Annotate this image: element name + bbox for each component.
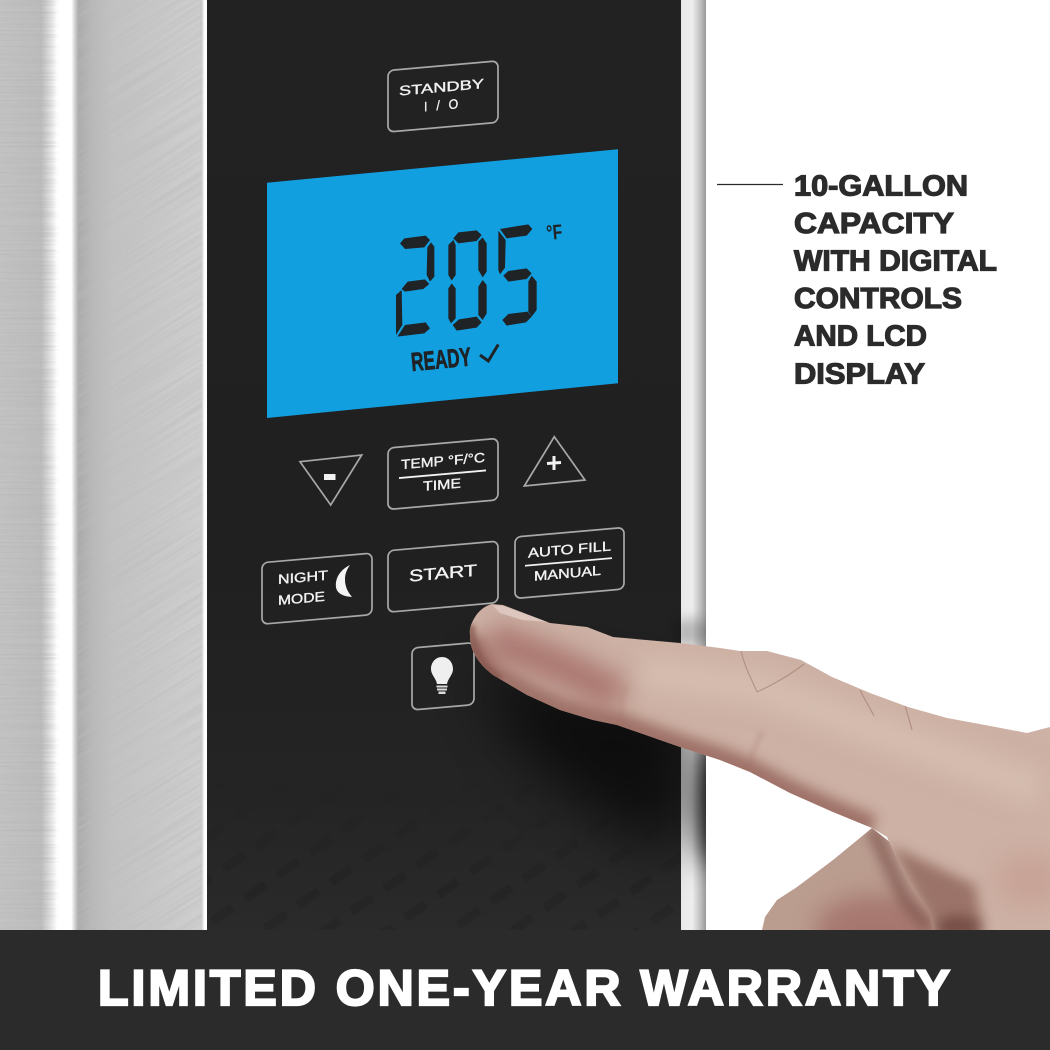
button: auto fill and manual: AUTO FILL [528, 538, 612, 561]
ready status: READY [410, 341, 472, 377]
button: temp and time: TIME [423, 476, 461, 494]
callout: capacity text: CAPACITY [794, 208, 954, 240]
degrees Fahrenheit unit: °F [545, 221, 563, 245]
temperature digits 205 [396, 224, 537, 337]
button: auto fill and manual [515, 527, 624, 598]
finger shadow on the panel [480, 618, 730, 867]
icon: crescent moon [336, 565, 352, 598]
banner heading: LIMITED ONE-YEAR WARRANTY [98, 960, 950, 1016]
callout: capacity text: AND LCD [794, 321, 927, 353]
button: temp and time [388, 438, 498, 510]
panel: brushed stainless steel housing [0, 0, 207, 930]
button: standby: I / O [424, 96, 461, 114]
hand: pointing finger [460, 600, 1050, 944]
fingernail [492, 605, 548, 622]
button: standby [388, 61, 498, 132]
knuckle creases [740, 651, 912, 756]
callout: capacity text [794, 171, 997, 390]
button: plus triangle [524, 437, 585, 486]
callout: capacity text: DISPLAY [794, 358, 925, 390]
button: temp and time: TEMP °F/°C [401, 450, 485, 472]
button: standby: STANDBY [399, 76, 484, 99]
knuckle highlight [640, 672, 1040, 790]
button: start [388, 541, 498, 612]
callout: capacity text: WITH DIGITAL [794, 246, 997, 278]
LCD display [267, 149, 618, 418]
icon: light bulb [431, 657, 453, 694]
button: minus triangle [300, 455, 362, 505]
button: night mode: MODE [278, 589, 325, 608]
button: auto fill and manual: MANUAL [534, 563, 602, 584]
LCD screen background [267, 149, 618, 418]
callout: capacity text: 10-GALLON [794, 171, 968, 203]
warranty banner [0, 930, 1050, 1050]
button: start: START [409, 561, 477, 586]
panel: black control panel [207, 0, 681, 930]
button: night mode: NIGHT [278, 568, 328, 587]
callout: capacity text: CONTROLS [794, 283, 962, 315]
lower hand shadow [890, 845, 983, 930]
hand: thumb [762, 828, 933, 930]
button: night mode [262, 553, 372, 624]
callout: leader line [717, 184, 783, 186]
button: light bulb [412, 643, 474, 710]
panel: silver side strip [681, 0, 706, 930]
finger underside shading [470, 640, 872, 828]
fingertip flush [488, 640, 620, 698]
